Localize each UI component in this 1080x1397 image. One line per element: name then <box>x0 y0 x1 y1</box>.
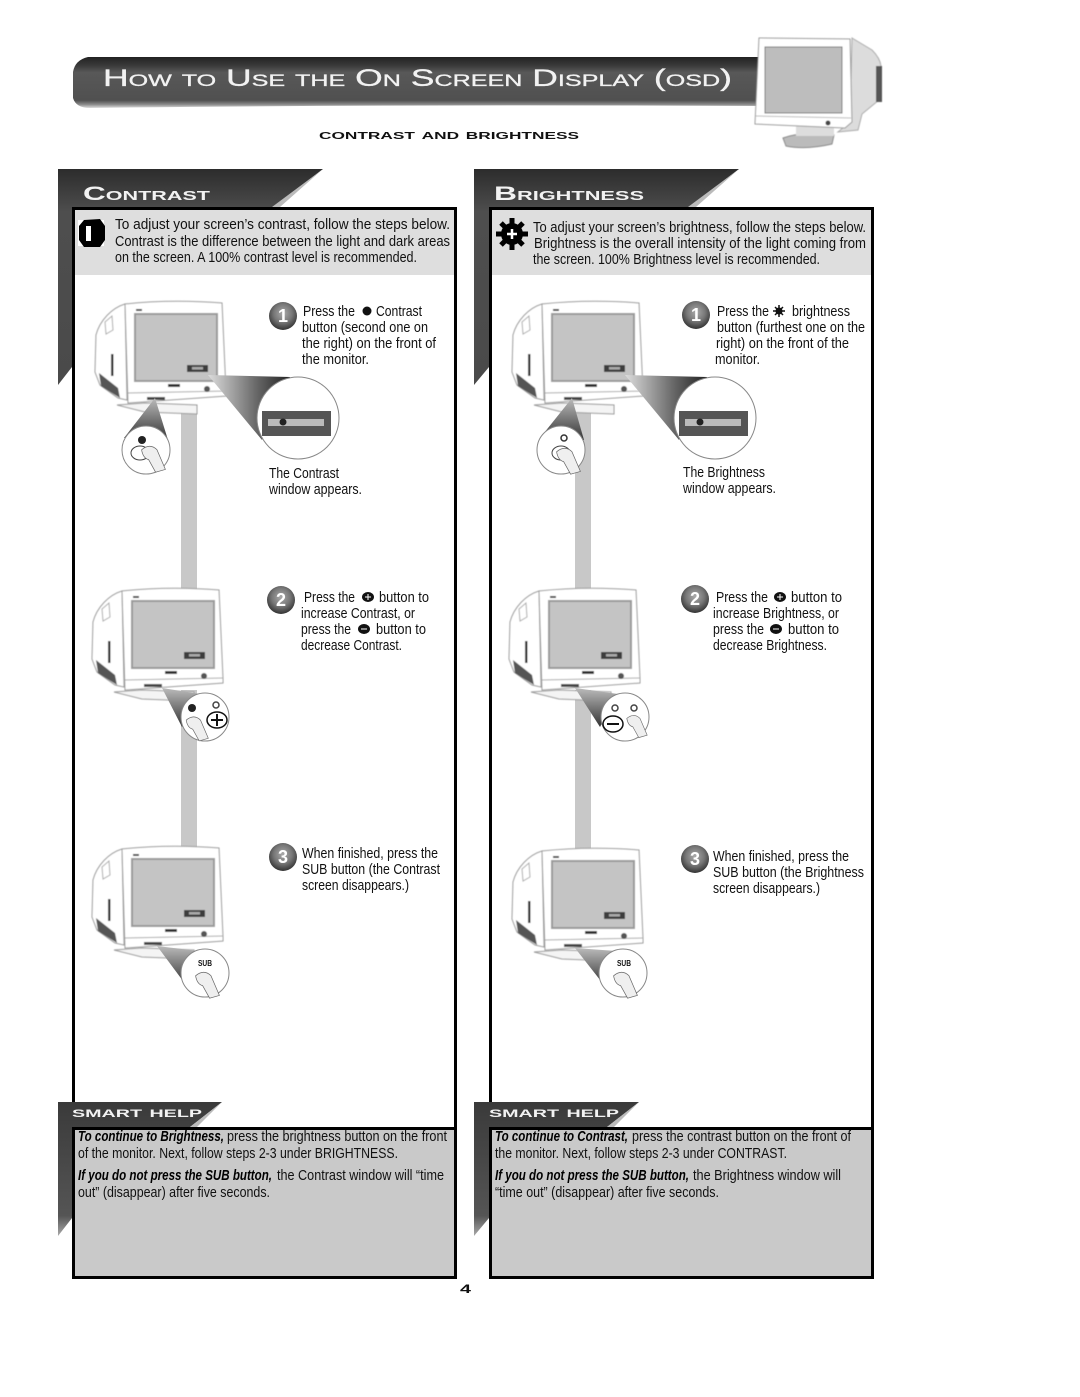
step 3 text: screen disappears.) <box>302 878 409 894</box>
contrast intro text <box>115 217 450 266</box>
step 3 text <box>713 849 864 897</box>
smart help text: If you do not press the SUB button, <box>495 1168 689 1184</box>
step 2 number: 2 <box>690 589 700 609</box>
brightness heading: Brightness <box>494 184 645 205</box>
panel: contrast <box>58 169 456 1278</box>
callout: SUB button: SUB <box>198 959 212 968</box>
brightness frame <box>490 208 872 1278</box>
brightness intro band <box>492 210 871 275</box>
contrast window text: The Contrast <box>269 466 339 482</box>
smart help text: the Contrast window will “time <box>277 1168 444 1184</box>
connector bars <box>575 405 591 855</box>
step 3 text: When finished, press the <box>302 846 438 862</box>
title text: How to Use the On Screen Display (osd) <box>103 65 732 92</box>
step 3 text: SUB button (the Contrast <box>302 862 440 878</box>
smart help box <box>74 1128 456 1278</box>
step 1 number: 1 <box>278 306 288 326</box>
contrast intro text: To adjust your screen’s contrast, follow the steps below. <box>115 217 450 233</box>
brightness window text: window appears. <box>682 481 776 497</box>
callout: OSD zoom <box>625 375 756 459</box>
title bar <box>73 57 760 108</box>
step 3 text: SUB button (the Brightness <box>713 865 864 881</box>
step 1 text: right) on the front of the <box>716 336 849 352</box>
step 2 text: Press the <box>304 590 355 606</box>
icon: brightness <box>496 218 528 250</box>
brightness intro text: To adjust your screen’s brightness, follow the steps below. <box>533 220 866 236</box>
step 2 text: button to <box>791 590 842 606</box>
step 1 number <box>682 301 710 329</box>
callout: brightness button <box>537 398 585 474</box>
brightness intro text: Brightness is the overall intensity of the light coming from <box>534 236 866 252</box>
smart help text: press the contrast button on the front of <box>632 1129 852 1145</box>
step 1 text: the monitor. <box>302 352 369 368</box>
subtitle: contrast and brightness <box>319 126 580 142</box>
step 3 number <box>269 843 297 871</box>
step 2 text: button to <box>788 622 839 638</box>
smart help text <box>495 1129 852 1201</box>
smart help text: To continue to Brightness, <box>78 1129 224 1145</box>
step 1 text: Contrast <box>376 304 422 320</box>
step 2 number <box>681 585 709 613</box>
step 2 text: increase Contrast, or <box>301 606 415 622</box>
step 1 text: monitor. <box>715 352 760 368</box>
step 1 text: Press the <box>717 304 769 320</box>
step 2 text <box>713 590 842 654</box>
step 1 text <box>715 304 865 368</box>
callout: SUB button <box>157 946 229 998</box>
step 3 number: 3 <box>278 847 288 867</box>
step 3 monitor <box>512 848 647 998</box>
callout: minus button <box>575 688 649 741</box>
step 2 number <box>267 586 295 614</box>
contrast heading: Contrast <box>83 184 210 205</box>
brightness intro text: the screen. 100% Brightness level is recommended. <box>533 252 820 268</box>
step 3 monitor <box>92 846 229 998</box>
step 3 text: screen disappears.) <box>713 881 820 897</box>
step 2 text: button to <box>376 622 426 638</box>
smart help heading: smart help <box>489 1104 619 1121</box>
brightness window text <box>682 465 776 497</box>
step 2 text <box>301 590 429 654</box>
step 2 text: press the <box>713 622 764 638</box>
step 1 text: brightness <box>792 304 850 320</box>
step 3 text <box>302 846 440 894</box>
step 2 text: increase Brightness, or <box>713 606 839 622</box>
step 2 text: decrease Contrast. <box>301 638 402 654</box>
step 2 text: press the <box>301 622 351 638</box>
contrast tab <box>58 169 323 385</box>
step 1 text <box>302 304 437 368</box>
smart help text: of the monitor. Next, follow steps 2-3 under BRIGHTNESS. <box>78 1146 398 1162</box>
step 1 text: button (second one on <box>302 320 428 336</box>
smart help text: out” (disappear) after five seconds. <box>78 1185 270 1201</box>
callout: plus button <box>162 688 229 741</box>
step 3 number <box>681 845 709 873</box>
smart help heading: smart help <box>72 1104 202 1121</box>
panel: brightness <box>474 169 872 1278</box>
contrast intro text: on the screen. A 100% contrast level is recommended. <box>115 250 417 266</box>
step 1 monitor <box>95 301 339 474</box>
smart help text: To continue to Contrast, <box>495 1129 628 1145</box>
brightness tab <box>474 169 739 385</box>
smart help text: If you do not press the SUB button, <box>78 1168 272 1184</box>
step 2 text: Press the <box>716 590 768 606</box>
step 1 text: Press the <box>303 304 355 320</box>
brightness intro text <box>533 220 866 268</box>
contrast intro text: Contrast is the difference between the light and dark areas <box>115 234 450 250</box>
icon: contrast <box>78 219 105 247</box>
page number: 4 <box>460 1282 472 1296</box>
step 2 text: decrease Brightness. <box>713 638 827 654</box>
callout: contrast button <box>122 398 170 474</box>
callout: SUB button: SUB <box>617 959 631 968</box>
smart help box <box>490 1128 872 1278</box>
contrast intro band <box>75 210 454 275</box>
step 1 monitor <box>512 301 756 474</box>
smart help: contrast <box>58 1102 456 1278</box>
contrast window text: window appears. <box>268 482 362 498</box>
callout: OSD zoom <box>208 375 339 459</box>
step 3 number: 3 <box>690 849 700 869</box>
step 1 number: 1 <box>691 305 701 325</box>
step 3 text: When finished, press the <box>713 849 849 865</box>
contrast frame <box>74 208 456 1278</box>
step 2 monitor <box>92 588 229 741</box>
brightness window text: The Brightness <box>683 465 765 481</box>
connector bars <box>181 405 197 855</box>
contrast window text <box>268 466 362 498</box>
step 2 number: 2 <box>276 590 286 610</box>
smart help: brightness <box>474 1102 872 1278</box>
smart help text <box>78 1129 447 1201</box>
callout: SUB button <box>575 948 647 998</box>
smart help text: the Brightness window will <box>693 1168 841 1184</box>
step 1 text: button (furthest one on the <box>717 320 865 336</box>
smart help text: press the brightness button on the front <box>227 1129 447 1145</box>
step 1 text: the right) on the front of <box>302 336 437 352</box>
smart help text: the monitor. Next, follow steps 2-3 under CONTRAST. <box>495 1146 787 1162</box>
smart help text: “time out” (disappear) after five seconds. <box>495 1185 719 1201</box>
step 2 text: button to <box>379 590 429 606</box>
step 1 number <box>269 302 297 330</box>
step 2 monitor <box>509 588 649 741</box>
icon: header monitor <box>755 38 882 148</box>
